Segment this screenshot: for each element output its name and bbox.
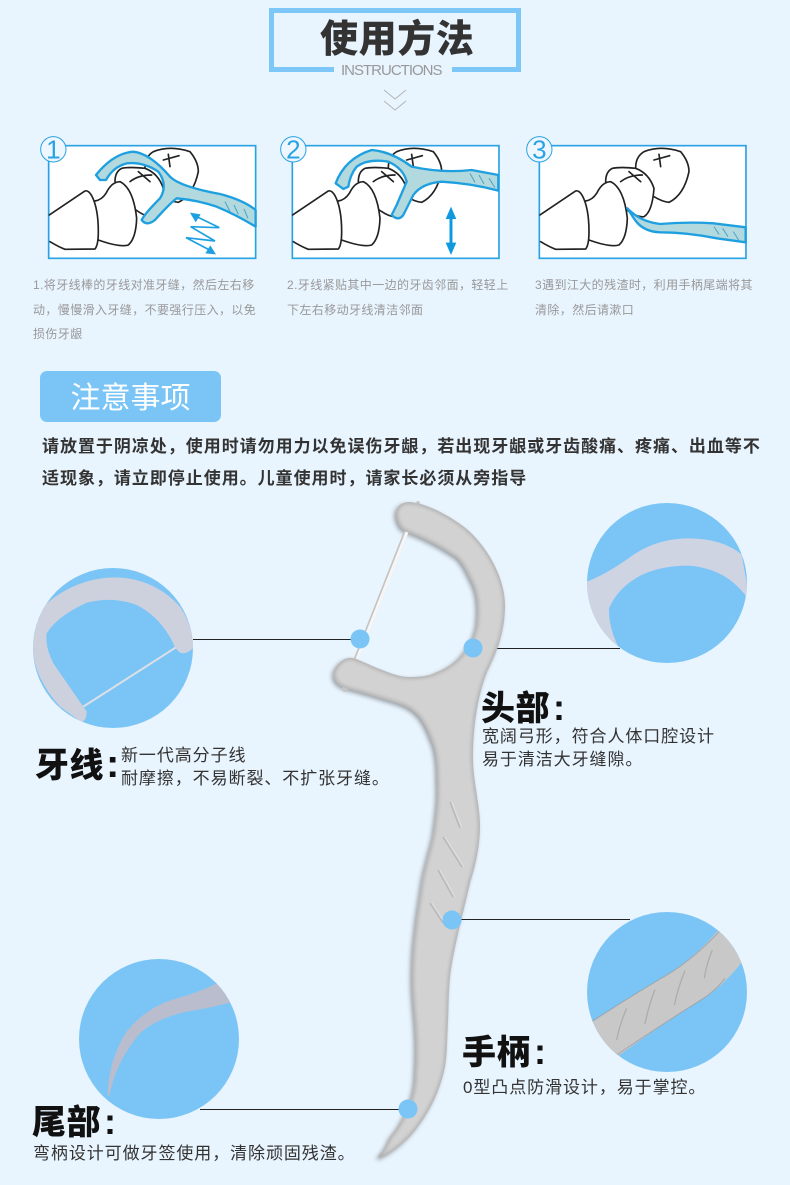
title frame	[272, 10, 518, 70]
text: head description	[482, 727, 715, 769]
text: step 3: 清除，然后请漱口	[535, 302, 634, 316]
text: tail description: 弯柄设计可做牙签使用，清除顽固残渣。	[33, 1144, 356, 1163]
callout circle: floss detail	[33, 568, 194, 728]
panel: step 1 illustration: 1	[46, 134, 61, 164]
callout circle: tail detail	[79, 959, 239, 1119]
heading badge: 注意事项: 注意事项	[70, 382, 190, 415]
text: floss description: 新一代高分子线	[121, 746, 246, 765]
label: head: 头部:	[481, 687, 566, 728]
text: caution paragraph	[42, 437, 761, 488]
text: step 2: 下左右移动牙线清洁邻面	[287, 302, 423, 316]
label: floss: 牙线:	[35, 742, 120, 786]
icon: double chevron down	[384, 90, 406, 110]
text: step 2: 2.牙线紧贴其中一边的牙齿邻面，轻轻上	[287, 278, 509, 292]
panel: step 3 illustration: 3	[532, 134, 547, 164]
text: step 1: 损伤牙龈	[33, 327, 83, 341]
callout circle: head detail	[582, 503, 750, 663]
text: head description: 宽阔弓形，符合人体口腔设计	[482, 727, 715, 746]
text: handle description: 0型凸点防滑设计，易于掌控。	[463, 1078, 706, 1097]
panel: step 3 illustration	[527, 134, 746, 258]
panel: step 1 illustration	[41, 134, 256, 258]
text: head description: 易于清洁大牙缝隙。	[482, 750, 643, 769]
leader lines	[193, 640, 630, 1110]
text: step 1	[33, 278, 256, 341]
text: step 2	[287, 278, 509, 316]
text: floss description	[121, 746, 390, 788]
panel: step 2 illustration	[281, 134, 499, 258]
label: handle: 手柄:	[462, 1031, 546, 1072]
subtitle: INSTRUCTIONS: INSTRUCTIONS	[341, 62, 442, 79]
text: caution paragraph: 适现象，请立即停止使用。儿童使用时，请家长必须从旁指导	[42, 469, 527, 488]
floss pick product	[332, 501, 505, 1160]
text: step 1: 动，慢慢滑入牙缝，不要强行压入，以免	[33, 302, 256, 316]
text: caution paragraph: 请放置于阴凉处，使用时请勿用力以免误伤牙龈，若出现牙龈或牙齿酸痛、疼痛、出血等不	[42, 437, 761, 456]
callout circle: handle detail	[587, 912, 747, 1072]
marker dots	[350, 630, 482, 1118]
text: step 3	[535, 278, 753, 316]
text: step 3: 3遇到江大的残渣时，利用手柄尾端将其	[535, 278, 753, 292]
title: 使用方法: 使用方法	[320, 19, 474, 61]
text: step 1: 1.将牙线棒的牙线对准牙缝，然后左右移	[33, 278, 255, 292]
heading badge: 注意事项	[40, 371, 221, 422]
panel: step 2 illustration: 2	[286, 134, 301, 164]
text: floss description: 耐摩擦，不易断裂、不扩张牙缝。	[121, 769, 390, 788]
label: tail: 尾部:	[32, 1101, 116, 1142]
